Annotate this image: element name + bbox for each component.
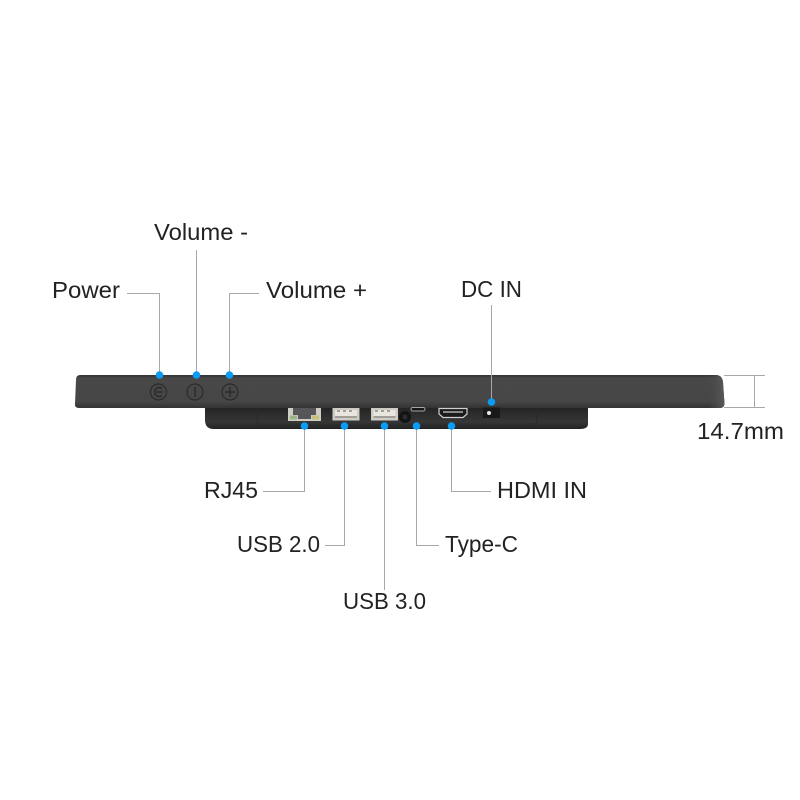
- port: RJ45: [288, 408, 321, 421]
- callout: HDMI IN: HDMI IN: [497, 477, 587, 503]
- button: power: [150, 384, 166, 400]
- callout: DC IN: DC IN: [461, 276, 522, 302]
- callout: USB 2.0: USB 2.0: [237, 531, 320, 557]
- callout: USB 3.0: USB 3.0: [343, 588, 426, 614]
- monitor base section: [205, 408, 588, 429]
- callout: HDMI IN: [448, 422, 587, 503]
- thickness label: 14.7mm: [697, 418, 784, 444]
- callout: Power: [52, 277, 163, 379]
- button: volume plus: [222, 384, 238, 400]
- callout: Volume plus: Volume +: [266, 277, 367, 303]
- callout: USB 3.0: [343, 422, 426, 614]
- callout: Volume plus: [226, 277, 367, 379]
- callout: Type-C: [413, 422, 518, 557]
- port: HDMI: [439, 408, 467, 418]
- callout: Type-C: Type-C: [445, 531, 518, 557]
- port: audio jack: [399, 411, 411, 423]
- monitor main body: [75, 375, 724, 408]
- callout: Power: Power: [52, 277, 120, 303]
- callout: USB 2.0: [237, 422, 348, 557]
- callout: Volume minus: Volume -: [154, 219, 248, 245]
- thickness dimension lines: [724, 376, 765, 408]
- port: USB 2.0: [332, 408, 360, 420]
- port: DC IN: [483, 408, 500, 418]
- port: USB 3.0: [371, 408, 398, 420]
- port: Type-C: [411, 408, 425, 411]
- callout: RJ45: RJ45: [204, 477, 258, 503]
- callout: DC IN: [461, 276, 522, 406]
- callout: Volume minus: [154, 219, 248, 379]
- callout: RJ45: [204, 422, 308, 503]
- button: volume minus: [187, 384, 203, 400]
